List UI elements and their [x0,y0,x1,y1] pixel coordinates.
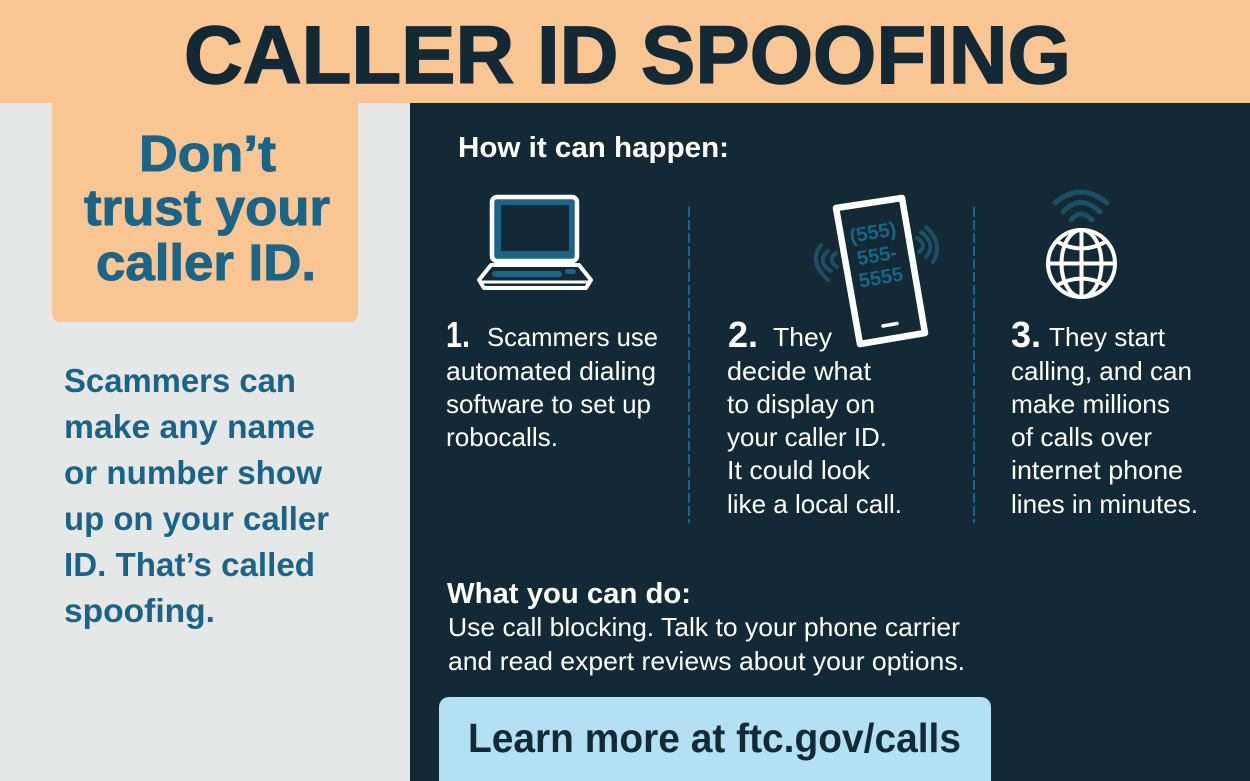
panel: right dark column [410,103,1250,781]
step 2 text: decide what [727,356,872,386]
divider 1 [688,207,690,523]
text block: advice [448,612,965,676]
step 2 text: your caller ID. [727,422,887,452]
icon: globe [1048,230,1115,297]
step 2 text: It could look [727,455,871,485]
text block: spoofing explanation: spoofing. [64,592,215,629]
step 3 text: They start [1049,322,1166,352]
step 2 text: like a local call. [727,489,902,519]
step 1 text: robocalls. [446,422,558,452]
text block: spoofing explanation [64,362,329,629]
panel: title banner [0,0,1250,103]
callout heading [84,125,330,291]
icon: right signal waves [917,227,937,262]
step 1 text: Scammers use [487,322,658,352]
text block: spoofing explanation: up on your caller [64,500,329,537]
text block: advice: Use call blocking. Talk to your phone carrier [448,612,960,642]
step 3 text: lines in minutes. [1011,489,1198,519]
panel: left grey column [0,103,410,781]
step 3 text [1011,314,1198,519]
divider 2 [973,207,975,523]
heading: how it can happen: How it can happen: [458,132,729,164]
icon: globe with wifi signal [1048,192,1115,297]
phone number: (555) [848,218,898,248]
button: learn more: Learn more at ftc.gov/calls [468,715,961,761]
callout heading: trust your [84,179,330,236]
panel: warning callout [52,103,358,322]
step 1 text [446,314,658,452]
heading: what you can do: What you can do: [447,578,691,610]
text block: spoofing explanation: ID. That’s called [64,546,315,583]
title: CALLER ID SPOOFING [184,10,1071,101]
step 1 text: software to set up [446,389,651,419]
text block: spoofing explanation: or number show [64,454,322,491]
step 2 text: to display on [727,389,875,419]
step 3 text: calling, and can [1011,356,1192,386]
phone number [848,218,905,293]
step 3 text: make millions [1011,389,1170,419]
text block: spoofing explanation: make any name [64,408,315,445]
phone number: 555- [855,242,899,270]
text block: advice: and read expert reviews about your options. [448,646,965,676]
step 2 text: 2. [728,314,758,355]
icon: laptop [479,197,591,288]
step 2 text: They [773,322,832,352]
callout heading: Don’t [139,125,276,182]
callout heading: caller ID. [96,234,316,291]
step 2 text [727,314,902,519]
step 3 text: of calls over [1011,422,1152,452]
icon: phone showing number [816,198,937,344]
icon: wifi arcs [1055,192,1107,220]
step 1 text: automated dialing [446,356,656,386]
button: learn more [439,697,991,781]
step 3 text: 3. [1011,314,1041,355]
step 3 text: internet phone [1011,455,1183,485]
text block: spoofing explanation: Scammers can [64,362,296,399]
icon: left signal waves [816,245,837,280]
phone number: 5555 [857,264,905,293]
step 1 text: 1. [446,314,470,355]
